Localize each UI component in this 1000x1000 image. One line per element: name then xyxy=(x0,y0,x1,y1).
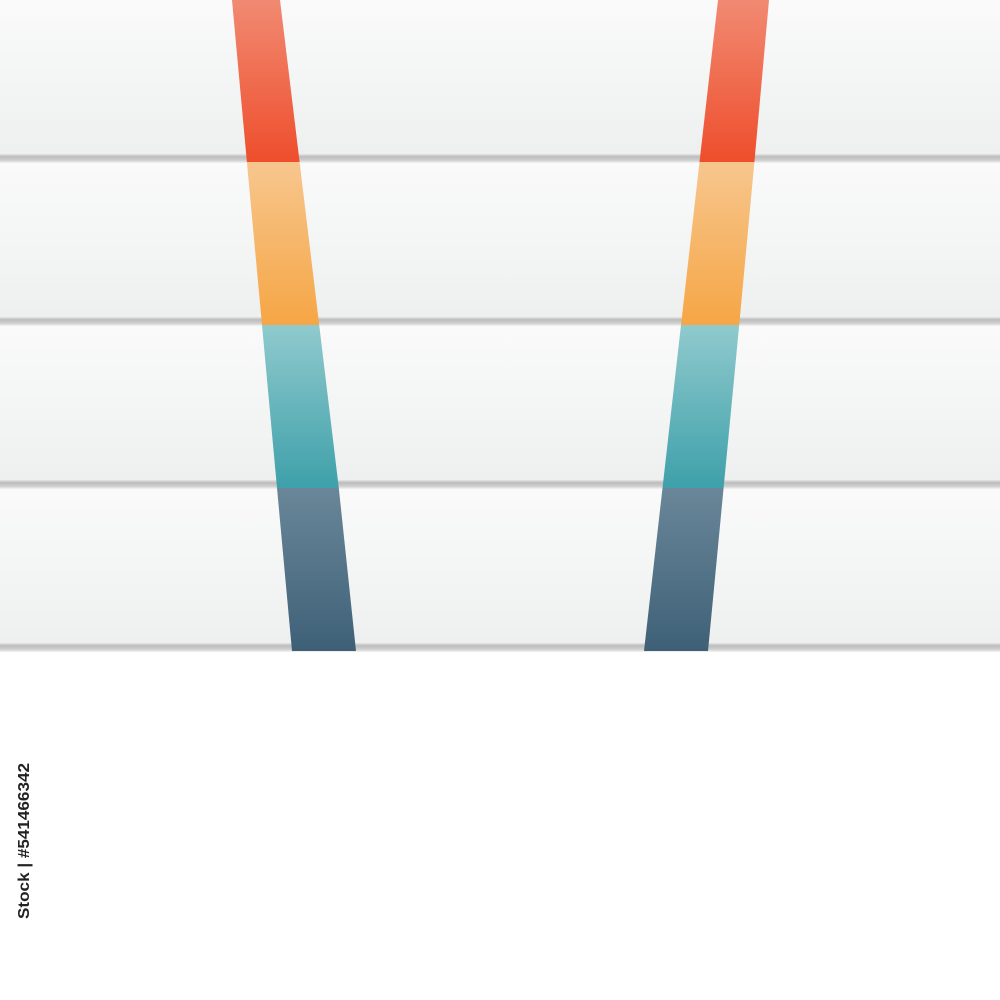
vertical stock id text: Stock | #541466342 xyxy=(16,763,33,919)
right strap xyxy=(644,0,769,651)
band 3 xyxy=(0,326,1000,481)
band 1 xyxy=(0,0,1000,155)
band 4 xyxy=(0,489,1000,644)
left strap xyxy=(232,0,356,651)
band 2 xyxy=(0,163,1000,318)
